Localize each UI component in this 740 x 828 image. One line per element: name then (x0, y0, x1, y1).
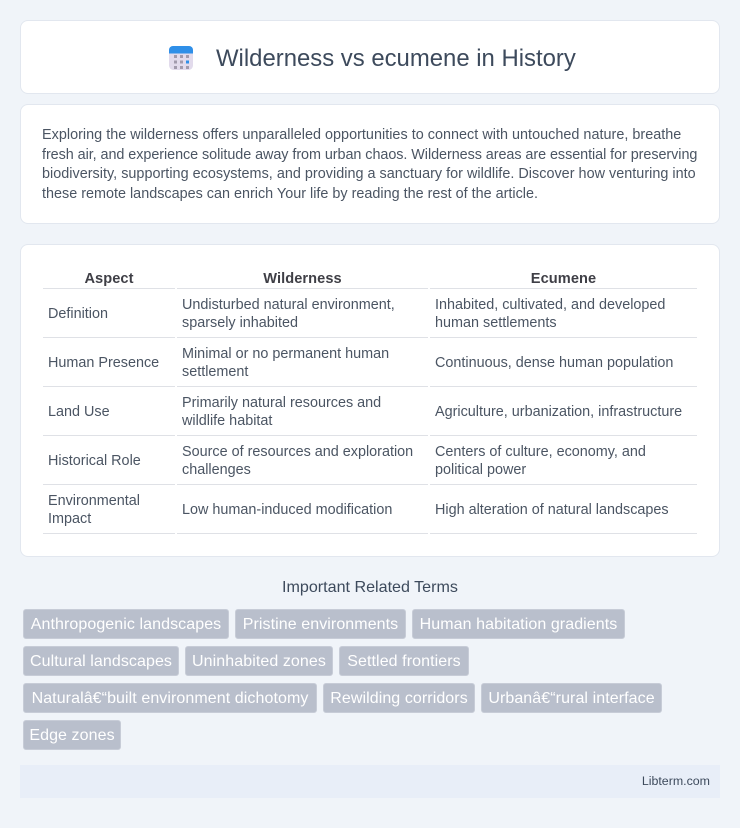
comparison table: Primarily natural resources and (182, 394, 381, 410)
row: Historical Role: Historical Role (48, 452, 141, 468)
comparison table: Continuous, dense human population (435, 354, 673, 370)
tag: Cultural landscapes (30, 653, 172, 670)
table header: Aspect: Aspect (84, 270, 134, 286)
icon: calendar (169, 46, 193, 70)
tag (323, 683, 475, 713)
tag: Uninhabited zones (192, 653, 326, 670)
comparison table: wildlife habitat (182, 412, 272, 428)
intro paragraph: fresh air, and experience solitude away from urban chaos. Wilderness areas are essential for preserving (42, 147, 697, 163)
comparison table: Source of resources and exploration (182, 444, 413, 460)
row: Environmental Impact: Environmental (48, 492, 140, 508)
comparison table: challenges (182, 462, 251, 478)
tag: Anthropogenic landscapes (31, 616, 221, 633)
row: Land Use: Land Use (48, 404, 110, 420)
tag (339, 646, 469, 676)
related terms heading: Important Related Terms (282, 578, 458, 596)
tag: Urbanâ€“rural interface (488, 690, 655, 707)
tag (412, 609, 625, 639)
tag: Settled frontiers (347, 653, 461, 670)
comparison table (43, 270, 697, 534)
comparison table: Inhabited, cultivated, and developed (435, 296, 665, 312)
table header: Wilderness: Wilderness (263, 270, 342, 286)
tag: Rewilding corridors (330, 690, 468, 707)
comparison table: Centers of culture, economy, and (435, 444, 646, 460)
comparison table: Agriculture, urbanization, infrastructure (435, 404, 682, 420)
tag: Naturalâ€“built environment dichotomy (32, 690, 308, 707)
intro paragraph: these remote landscapes can enrich Your life by reading the rest of the article. (42, 186, 538, 202)
tag (23, 720, 121, 750)
footer credit: Libterm.com (642, 774, 710, 788)
footer bar (20, 765, 720, 798)
tag (185, 646, 333, 676)
tag (23, 609, 229, 639)
tag (481, 683, 662, 713)
tag: Edge zones (29, 727, 115, 744)
intro paragraph: biodiversity, supporting ecosystems, and providing a sanctuary for wildlife. Discover how venturing into (42, 166, 696, 182)
tag: Pristine environments (243, 616, 398, 633)
tag: Human habitation gradients (420, 616, 617, 633)
row: Definition: Definition (48, 306, 108, 322)
heading: Wilderness vs ecumene in History (216, 45, 576, 72)
comparison table: human settlements (435, 314, 557, 330)
panel: comparison table (20, 244, 720, 557)
intro paragraph (42, 127, 697, 202)
comparison table: Low human-induced modification (182, 502, 392, 518)
title card (20, 20, 720, 94)
intro paragraph: Exploring the wilderness offers unparalleled opportunities to connect with untouched nature, breathe (42, 127, 681, 143)
tag (23, 646, 179, 676)
comparison table: settlement (182, 364, 248, 380)
table header: Ecumene: Ecumene (531, 270, 596, 286)
intro text panel (20, 104, 720, 224)
related term tags (23, 609, 662, 750)
comparison table: sparsely inhabited (182, 314, 298, 330)
tag (23, 683, 317, 713)
row: Human Presence: Human Presence (48, 354, 159, 370)
comparison table: High alteration of natural landscapes (435, 502, 669, 518)
tag (235, 609, 406, 639)
row: Environmental Impact (48, 492, 140, 526)
row: Environmental Impact: Impact (48, 510, 91, 526)
comparison table: political power (435, 462, 526, 478)
comparison table: Minimal or no permanent human (182, 346, 389, 362)
comparison table: Undisturbed natural environment, (182, 296, 395, 312)
